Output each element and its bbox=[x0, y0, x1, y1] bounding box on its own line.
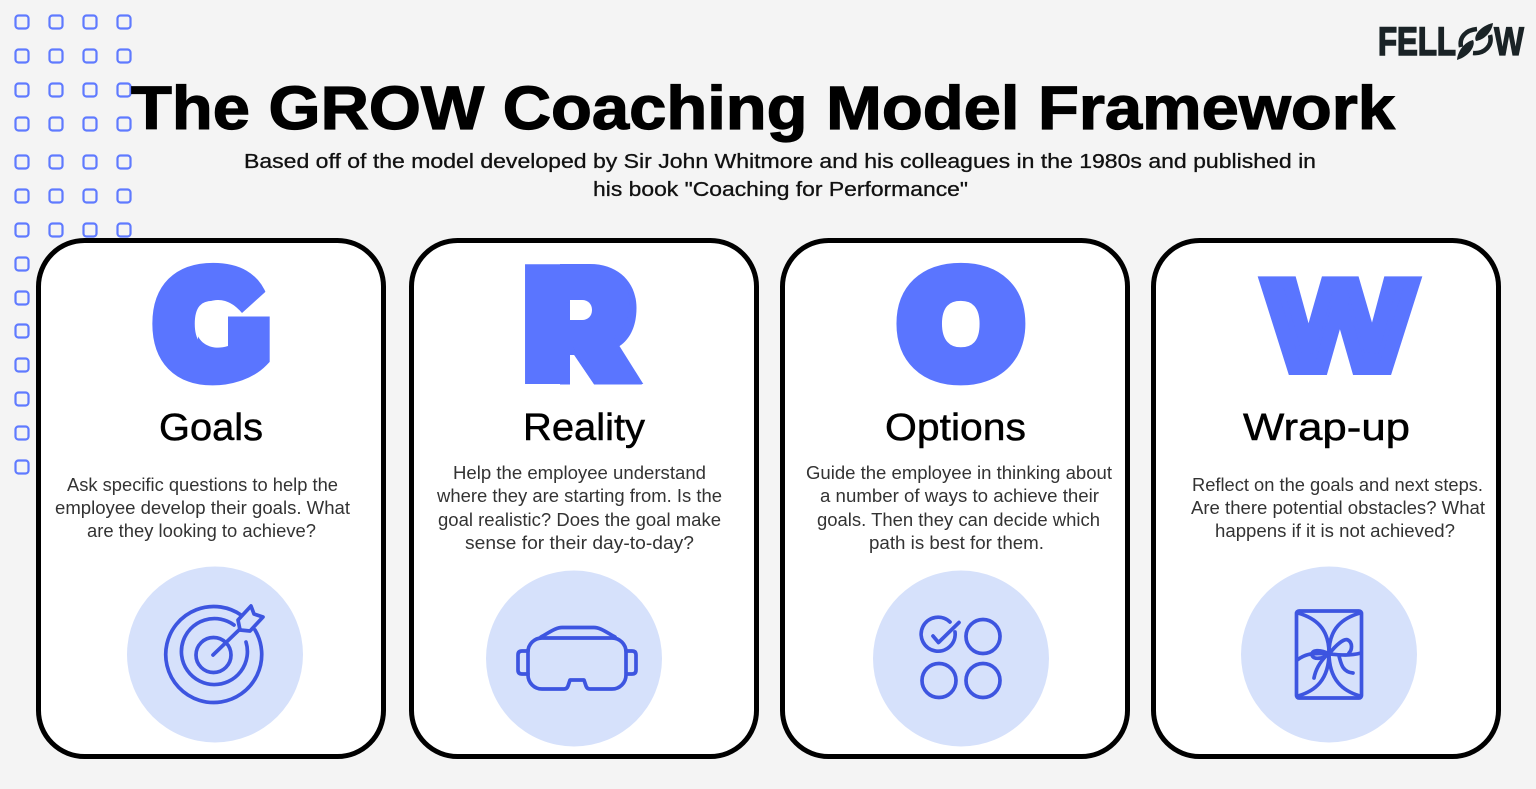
text: Goals description bbox=[55, 475, 350, 541]
heading: Goals: Goals bbox=[159, 407, 263, 449]
text: Goals description: employee develop their goals. What bbox=[55, 498, 350, 518]
title: The GROW Coaching Model Framework bbox=[131, 74, 1395, 142]
icon circle bbox=[486, 570, 662, 746]
text: Options description: path is best for them. bbox=[869, 533, 1044, 553]
subtitle: his book "Coaching for Performance" bbox=[593, 178, 968, 201]
text: Reality description: where they are starting from. Is the bbox=[436, 486, 722, 506]
heading: Options: Options bbox=[885, 407, 1026, 449]
icon: VR headset bbox=[518, 628, 636, 689]
icon: checklist circles bbox=[921, 617, 1000, 698]
text: Wrap-up description: happens if it is not achieved? bbox=[1215, 521, 1455, 541]
panel: Goals bbox=[38, 240, 384, 756]
text: Wrap-up description bbox=[1191, 475, 1485, 541]
text: Wrap-up description: Reflect on the goals and next steps. bbox=[1192, 475, 1483, 495]
big letter G: G bbox=[158, 245, 268, 404]
heading: Wrap-up: Wrap-up bbox=[1243, 407, 1410, 449]
text: Wrap-up description: Are there potential obstacles? What bbox=[1191, 498, 1485, 518]
decorative square dot grid bbox=[16, 16, 130, 474]
logo: Fellow bbox=[1378, 20, 1524, 64]
text: Reality description: sense for their day-to-day? bbox=[465, 533, 694, 553]
heading: Reality: Reality bbox=[523, 407, 645, 449]
text: Options description bbox=[806, 463, 1112, 553]
panel: Wrap-up bbox=[1154, 240, 1498, 756]
icon: wrapped gift with ribbon bbox=[1296, 611, 1362, 698]
panel: Reality bbox=[412, 240, 756, 756]
text: Reality description bbox=[436, 463, 722, 553]
text: Reality description: Help the employee understand bbox=[453, 463, 706, 483]
icon circle bbox=[1241, 566, 1417, 742]
panel: Options bbox=[782, 240, 1128, 756]
big letter W: W bbox=[1267, 255, 1413, 396]
big letter O: O bbox=[902, 245, 1020, 404]
text: Goals description: are they looking to achieve? bbox=[87, 521, 316, 541]
text: Goals description: Ask specific questions to help the bbox=[67, 475, 338, 495]
icon circle bbox=[873, 570, 1049, 746]
icon: target with arrow bbox=[166, 606, 263, 702]
text: Reality description: goal realistic? Does the goal make bbox=[438, 510, 721, 530]
logo: Fellow: FELL bbox=[1378, 20, 1456, 64]
text: Options description: Guide the employee in thinking about bbox=[806, 463, 1112, 483]
text: Options description: goals. Then they can decide which bbox=[817, 510, 1100, 530]
subtitle: Based off of the model developed by Sir John Whitmore and his colleagues in the 1980s and published in bbox=[244, 150, 1316, 173]
subtitle bbox=[244, 150, 1316, 201]
icon circle bbox=[127, 566, 303, 742]
big letter R: R bbox=[526, 245, 626, 404]
logo: Fellow: W bbox=[1494, 20, 1524, 64]
text: Options description: a number of ways to achieve their bbox=[820, 486, 1099, 506]
